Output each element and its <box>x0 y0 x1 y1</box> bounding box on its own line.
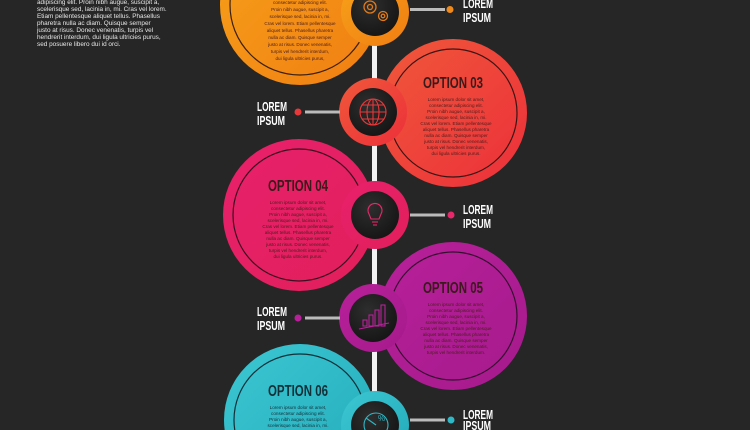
panel: option 04 (pink): dui ligula ultricies purus. <box>273 254 323 259</box>
panel: option 05 (magenta): Lorem ipsum dolor sit amet, <box>428 302 484 307</box>
panel: option 04 (pink): Lorem ipsum dolor sit amet, <box>270 200 326 205</box>
panel: option 05 (magenta): scelerisque sed, lacinia in, mi. <box>425 320 487 325</box>
panel: option 02 (orange): turpis vel hendrerit interdum, <box>271 49 329 54</box>
panel: option 03 (red): consectetur adipiscing elit. <box>429 103 483 108</box>
top-left text block: pharetra nulla ac diam. Quisque semper <box>37 20 152 27</box>
panel: option 03 (red) <box>339 39 527 187</box>
timeline line <box>372 30 377 430</box>
panel: option 02 (orange): justo at risus. Donec venenatis, <box>267 42 332 47</box>
connector + label LOREM IPSUM (row 6): LOREM <box>463 407 493 422</box>
panel: option 04 (pink): consectetur adipiscing elit. <box>271 206 325 211</box>
icon: globe <box>360 99 386 125</box>
icon: bar chart <box>359 305 389 329</box>
panel: option 05 (magenta): turpis vel hendrerit interdum. <box>427 350 485 355</box>
panel: option 05 (magenta): Proin nibh augue, suscipit a, <box>427 314 485 319</box>
icon: percent pie: % <box>378 414 385 423</box>
panel: option 02 (orange): Proin nibh augue, suscipit a, <box>271 7 329 12</box>
top-left text block: hendrerit interdum, dui ligula ultricies purus, <box>37 34 161 41</box>
panel: option 03 (red): OPTION 03 <box>423 75 483 92</box>
connector + label LOREM IPSUM (row 3): LOREM <box>257 99 287 114</box>
connector + label LOREM IPSUM (row 6) <box>410 407 493 430</box>
panel: option 05 (magenta): justo at risus. Donec venenatis, <box>423 344 488 349</box>
top-left text block: sed posuere libero dui id orci. <box>37 41 121 48</box>
panel: option 02 (orange): Cras vel lorem. Etiam pellentesque <box>264 21 336 26</box>
panel: option 05 (magenta): Cras vel lorem. Etiam pellentesque <box>420 326 492 331</box>
connector + label LOREM IPSUM (row 5): IPSUM <box>257 318 285 333</box>
panel: option 03 (red): dui ligula ultricies purus. <box>431 151 481 156</box>
connector + label LOREM IPSUM (row 4): IPSUM <box>463 216 491 231</box>
panel: option 05 (magenta): OPTION 05 <box>423 280 483 297</box>
panel: option 04 (pink) <box>223 139 409 291</box>
panel: option 04 (pink): scelerisque sed, lacinia in, mi. <box>267 218 329 223</box>
panel: option 02 (orange) <box>220 0 409 85</box>
panel: option 02 (orange): scelerisque sed, lacinia in, mi. <box>269 14 331 19</box>
connector + label LOREM IPSUM (row 5) <box>257 304 340 333</box>
connector + label LOREM IPSUM (row 4): LOREM <box>463 202 493 217</box>
top-left text block: scelerisque sed, lacinia in, mi. Cras vel lorem. <box>37 6 167 13</box>
panel: option 03 (red): nulla ac diam. Quisque semper <box>424 133 488 138</box>
panel: option 02 (orange): consectetur adipiscing elit. <box>273 0 327 5</box>
panel: option 06 (cyan): Lorem ipsum dolor sit amet, <box>270 405 326 410</box>
top-left text block <box>36 0 167 48</box>
icon: light bulb <box>368 203 382 225</box>
panel: option 03 (red): scelerisque sed, lacinia in, mi. <box>425 115 487 120</box>
connector + label LOREM IPSUM (row 2) <box>410 0 493 25</box>
panel: option 02 (orange): aliquet tellus. Phasellus pharetra <box>267 28 334 33</box>
top-left text block: justo at risus. Donec venenatis, turpis vel <box>36 27 153 34</box>
panel: option 04 (pink): aliquet tellus. Phasellus pharetra <box>265 230 332 235</box>
connector + label LOREM IPSUM (row 4) <box>410 202 493 231</box>
panel: option 06 (cyan) <box>224 344 409 430</box>
panel: option 03 (red): justo at risus. Donec venenatis, <box>423 139 488 144</box>
icon: percent pie <box>364 413 388 430</box>
panel: option 06 (cyan): Proin nibh augue, suscipit a, <box>269 417 327 422</box>
panel: option 04 (pink): justo at risus. Donec venenatis, <box>265 242 330 247</box>
panel: option 06 (cyan): scelerisque sed, lacinia in, mi. <box>267 423 329 428</box>
panel: option 04 (pink): Proin nibh augue, suscipit a, <box>269 212 327 217</box>
panel: option 04 (pink): turpis vel hendrerit interdum, <box>269 248 327 253</box>
panel: option 06 (cyan): consectetur adipiscing elit. <box>271 411 325 416</box>
connector + label LOREM IPSUM (row 3): IPSUM <box>257 113 285 128</box>
connector + label LOREM IPSUM (row 5): LOREM <box>257 304 287 319</box>
panel: option 05 (magenta): aliquet tellus. Phasellus pharetra <box>423 332 490 337</box>
connector + label LOREM IPSUM (row 2): IPSUM <box>463 10 491 25</box>
panel: option 05 (magenta) <box>339 242 527 390</box>
panel: option 03 (red): aliquet tellus. Phasellus pharetra <box>423 127 490 132</box>
panel: option 06 (cyan): OPTION 06 <box>268 383 328 400</box>
connector + label LOREM IPSUM (row 3) <box>257 99 340 128</box>
panel: option 03 (red): Cras vel lorem. Etiam pellentesque <box>420 121 492 126</box>
panel: option 04 (pink): OPTION 04 <box>268 178 328 195</box>
panel: option 05 (magenta): consectetur adipiscing elit. <box>429 308 483 313</box>
top-left text block: Etiam pellentesque aliquet tellus. Phasellus <box>37 13 160 20</box>
panel: option 02 (orange): dui ligula ultricies purus, <box>275 56 325 61</box>
panel: option 05 (magenta): nulla ac diam. Quisque semper <box>424 338 488 343</box>
panel: option 03 (red): turpis vel hendrerit interdum, <box>427 145 485 150</box>
panel: option 03 (red): Lorem ipsum dolor sit amet, <box>428 97 484 102</box>
panel: option 04 (pink): Cras vel lorem. Etiam pellentesque <box>262 224 334 229</box>
panel: option 03 (red): Proin nibh augue, suscipit a, <box>427 109 485 114</box>
panel: option 04 (pink): nulla ac diam. Quisque semper <box>266 236 330 241</box>
icon: gears <box>364 1 388 20</box>
panel: option 02 (orange): nulla ac diam. Quisque semper <box>268 35 332 40</box>
